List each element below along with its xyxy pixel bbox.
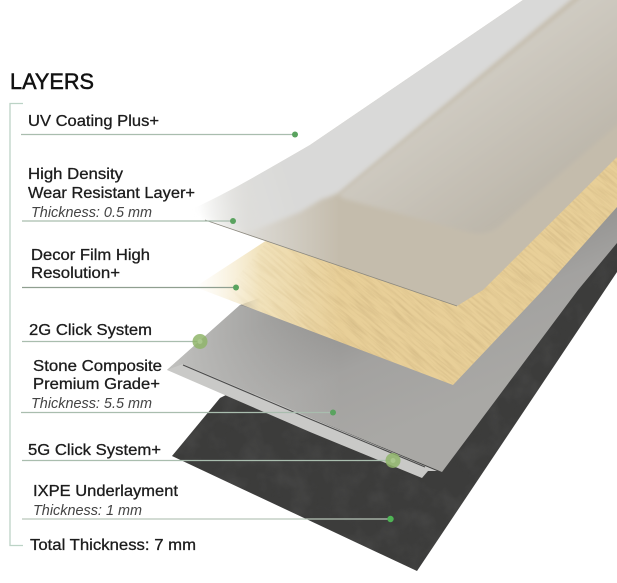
label: High Density Wear Resistant Layer+: Wear Resistant Layer+	[28, 185, 195, 202]
label: High Density Wear Resistant Layer+	[22, 166, 236, 224]
layer: wear resistant and UV coating	[175, 0, 617, 306]
label: IXPE Underlayment: Thickness: 1 mm	[33, 502, 142, 519]
label: Decor Film High Resolution+	[22, 247, 239, 290]
label: UV Coating Plus+	[21, 113, 298, 138]
label: High Density Wear Resistant Layer+: Thickness: 0.5 mm	[31, 204, 152, 221]
label: 2G Click System: 2G Click System	[29, 322, 152, 339]
layer: IXPE underlayment	[172, 243, 617, 571]
bracket	[10, 104, 23, 546]
label: Total Thickness: Total Thickness: 7 mm	[30, 537, 196, 554]
label: IXPE Underlayment: IXPE Underlayment	[33, 483, 179, 500]
label: Stone Composite Premium Grade+: Stone Composite	[33, 358, 162, 375]
label: 5G Click System+	[22, 442, 400, 468]
label: IXPE Underlayment	[22, 483, 394, 522]
layer: decor film wood	[206, 157, 617, 385]
label: High Density Wear Resistant Layer+: High Density	[28, 166, 123, 183]
title: LAYERS	[10, 69, 94, 94]
label: Decor Film High Resolution+: Decor Film High	[31, 247, 150, 264]
label: 2G Click System	[22, 322, 208, 349]
label: Stone Composite Premium Grade+	[21, 358, 336, 416]
label: Decor Film High Resolution+: Resolution+	[31, 265, 120, 282]
label: Stone Composite Premium Grade+: Thickness: 5.5 mm	[31, 395, 152, 412]
label: UV Coating Plus+: UV Coating Plus+	[28, 113, 159, 130]
label: 5G Click System+: 5G Click System+	[28, 442, 161, 459]
layer: stone composite core	[167, 170, 617, 478]
label: Stone Composite Premium Grade+: Premium Grade+	[33, 376, 160, 393]
flooring layers illustration	[160, 0, 617, 578]
